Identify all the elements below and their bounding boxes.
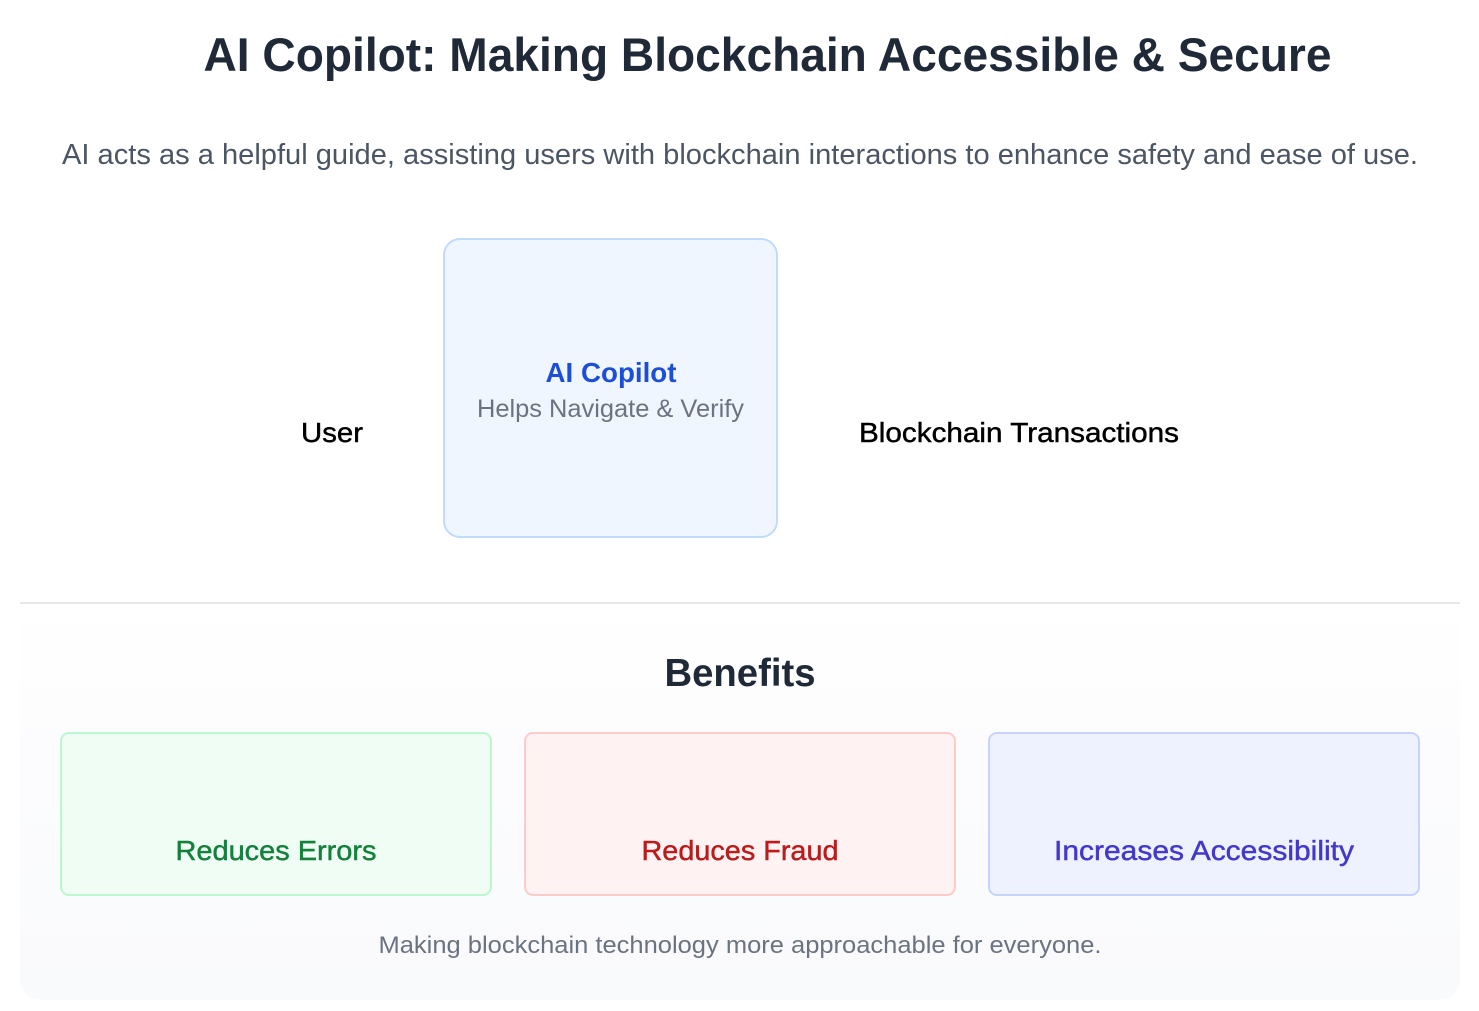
benefits heading: Benefits — [664, 652, 816, 695]
closing note: Making blockchain technology more approachable for everyone. — [378, 932, 1102, 959]
card: reduces errors — [61, 733, 491, 895]
card: reduces fraud — [525, 733, 955, 895]
title: AI Copilot: Making Blockchain Accessible & Secure — [204, 28, 1332, 81]
AI copilot description: Helps Navigate & Verify — [477, 395, 745, 423]
label: blockchain transactions: Blockchain Transactions — [859, 417, 1179, 448]
card: reduces errors: Reduces Errors — [176, 835, 376, 866]
card: increases accessibility: Increases Accessibility — [1054, 835, 1354, 866]
label: user: User — [301, 417, 363, 448]
panel: AI copilot — [444, 239, 777, 537]
subtitle: AI acts as a helpful guide, assisting users with blockchain interactions to enhance safety and ease of use. — [62, 139, 1418, 171]
AI copilot heading: AI Copilot — [546, 357, 676, 388]
card: increases accessibility — [989, 733, 1419, 895]
card: reduces fraud: Reduces Fraud — [642, 835, 838, 866]
panel: benefits — [20, 602, 1460, 1000]
